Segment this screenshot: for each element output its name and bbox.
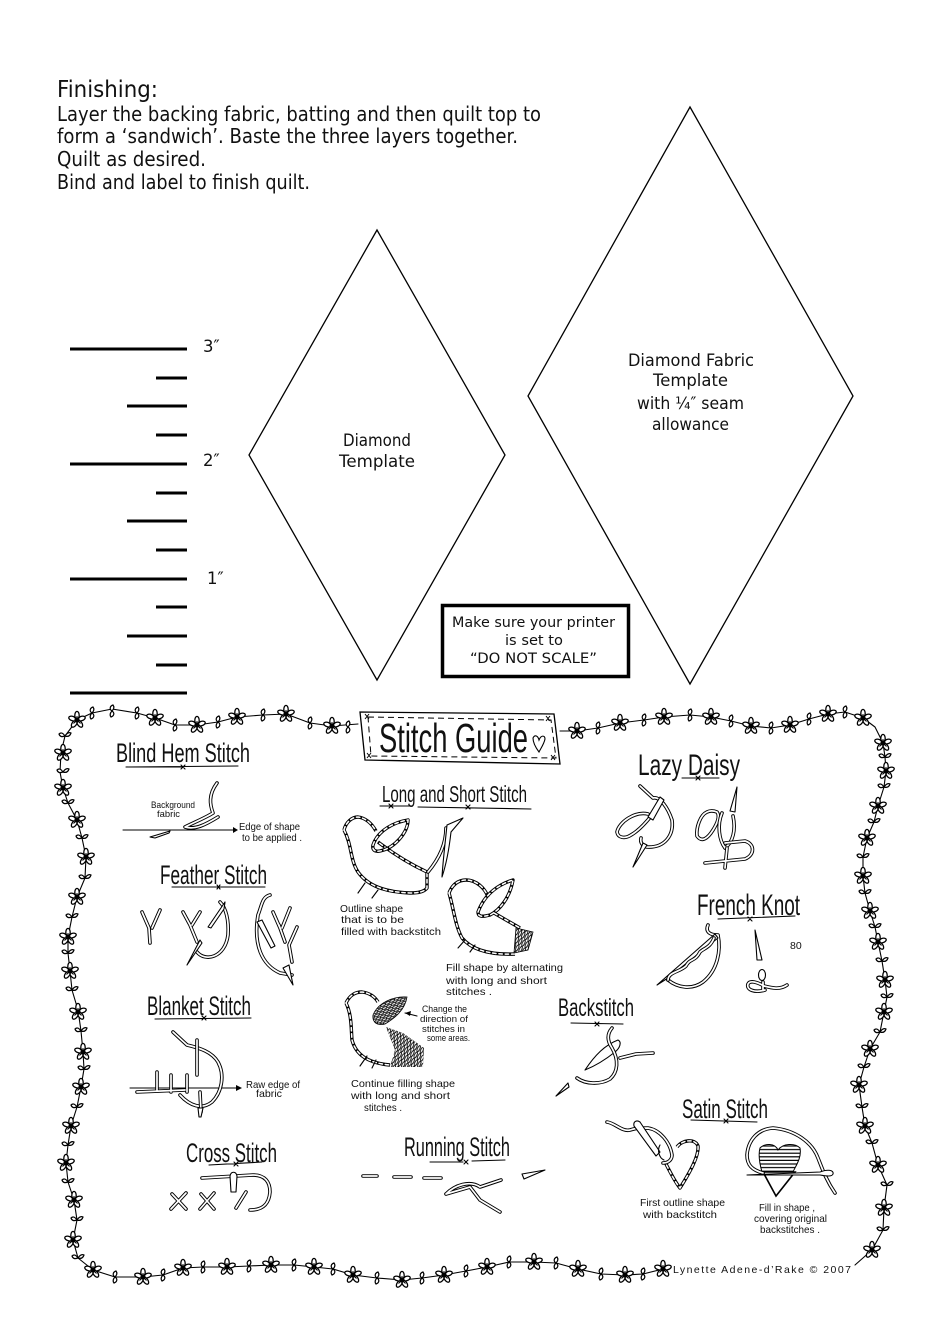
section: Blind Hem Stitch: fabric	[157, 809, 180, 820]
diamond fabric template: with ¼″ seam	[637, 394, 744, 414]
stitch notes: with long and short	[350, 1090, 450, 1102]
callout: printer scale note: is set to	[505, 633, 563, 649]
callout: printer scale note: Make sure your printer	[452, 615, 615, 631]
section: Backstitch: Backstitch	[558, 994, 634, 1022]
ruler: inch scale	[70, 337, 224, 693]
section: French Knot: French Knot	[697, 889, 800, 922]
stitch notes: direction of	[420, 1014, 469, 1024]
text block: finishing instructions	[57, 102, 541, 194]
section: Blind Hem Stitch: to be applied .	[242, 832, 302, 844]
section: Cross Stitch: Cross Stitch	[186, 1138, 277, 1168]
heart filled with satin stitch	[747, 1128, 835, 1196]
ruler: inch scale: 1″	[207, 569, 224, 588]
section: Satin Stitch: Satin Stitch	[682, 1094, 768, 1124]
bird half filled with stitches	[449, 880, 533, 954]
ruler: inch scale: 3″	[203, 337, 220, 356]
diamond template: Template	[338, 452, 415, 472]
diamond template: Diamond	[343, 431, 411, 451]
section: Long and Short Stitch: Long and Short Stitch	[382, 781, 527, 807]
section: Blanket Stitch: Blanket Stitch	[147, 991, 251, 1021]
text block: finishing instructions: Layer the backing fabric, batting and then quilt top to	[57, 102, 541, 126]
section: Running Stitch	[363, 1132, 545, 1212]
section: Satin Stitch	[607, 1094, 835, 1236]
satin stitch notes	[640, 1197, 827, 1236]
callout: printer scale note	[442, 606, 628, 676]
stitch notes: stitches .	[364, 1102, 402, 1114]
section: Running Stitch: Running Stitch	[404, 1132, 510, 1162]
satin stitch notes: backstitches .	[760, 1224, 820, 1236]
title: Stitch Guide label	[360, 712, 560, 764]
stitch notes: with long and short	[445, 975, 547, 987]
title: Stitch Guide label: Stitch Guide	[379, 715, 528, 761]
stitch notes: that is to be	[341, 914, 404, 926]
stitch notes: filled with backstitch	[341, 926, 441, 938]
section: Lazy Daisy	[617, 749, 752, 868]
satin stitch notes: First outline shape	[640, 1197, 725, 1209]
stitch notes: some areas.	[427, 1033, 470, 1043]
section: Blind Hem Stitch: Background	[151, 800, 195, 811]
text block: finishing instructions: Quilt as desired.	[57, 147, 206, 171]
stitch notes: stitches .	[446, 986, 492, 998]
section: Blanket Stitch	[130, 991, 300, 1117]
section: Blind Hem Stitch: Edge of shape	[239, 821, 300, 833]
text block: finishing instructions: form a ‘sandwich’. Baste the three layers together.	[57, 124, 518, 148]
flower and leaf stitched border	[54, 705, 895, 1288]
signature: Lynette Adene-d’Rake © 2007	[673, 1264, 851, 1276]
section: Blanket Stitch: Raw edge of	[246, 1079, 300, 1091]
section: Backstitch	[556, 994, 653, 1096]
stitch notes: Change the	[422, 1004, 467, 1014]
callout: printer scale note: “DO NOT SCALE”	[470, 651, 597, 667]
section: Feather Stitch	[142, 860, 297, 985]
diamond fabric template	[528, 107, 853, 684]
diamond fabric template: Diamond Fabric	[628, 351, 754, 371]
stitch notes: Fill shape by alternating	[446, 962, 563, 974]
section: Cross Stitch	[171, 1138, 277, 1210]
heart outlined in backstitch	[607, 1121, 698, 1188]
satin stitch notes: covering original	[754, 1213, 827, 1225]
section: Blind Hem Stitch: Blind Hem Stitch	[116, 738, 250, 768]
diamond template	[249, 230, 505, 680]
satin stitch notes: with backstitch	[642, 1209, 717, 1221]
satin stitch notes: Fill in shape ,	[759, 1202, 815, 1214]
section: Long and Short Stitch	[340, 781, 563, 1114]
stitch notes: Outline shape	[340, 903, 403, 915]
ruler: inch scale: 2″	[203, 451, 220, 470]
stitch notes	[340, 903, 563, 1114]
text block: finishing instructions: Bind and label to finish quilt.	[57, 170, 310, 194]
section: French Knot	[657, 889, 802, 991]
section: Blanket Stitch: fabric	[256, 1088, 282, 1100]
stitch notes: Continue filling shape	[351, 1078, 455, 1090]
section: French Knot: 80	[790, 940, 802, 952]
diamond fabric template: allowance	[652, 415, 729, 435]
section: Lazy Daisy: Lazy Daisy	[638, 749, 740, 782]
bird outline with backstitch	[344, 817, 463, 898]
heading: Finishing: Finishing:	[57, 77, 158, 103]
bird filled with long and short stitches	[346, 992, 424, 1068]
diamond fabric template: Template	[652, 371, 728, 391]
stitch notes: stitches in	[422, 1024, 465, 1034]
section: Feather Stitch: Feather Stitch	[160, 860, 267, 890]
section: Blind Hem Stitch	[116, 738, 302, 844]
